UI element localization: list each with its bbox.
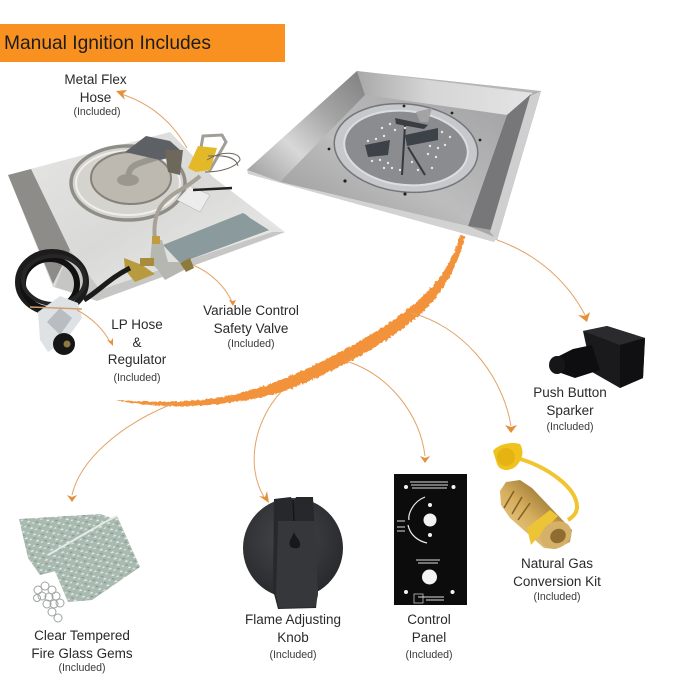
- label: flame adjusting knob: Knob: [277, 630, 309, 645]
- label: push button sparker: Push Button: [533, 385, 607, 400]
- label: safety valve: [203, 303, 299, 350]
- label: control panel: [405, 612, 453, 661]
- label: fire glass gems: Clear Tempered: [34, 628, 130, 643]
- label: control panel: Control: [407, 612, 451, 627]
- label: flame adjusting knob: [245, 612, 341, 661]
- label: metal flex hose: Hose: [80, 90, 111, 105]
- label: flame adjusting knob: (Included): [269, 649, 317, 661]
- label: LP hose and regulator: &: [132, 335, 142, 350]
- label: natural gas conversion kit: [513, 556, 601, 603]
- arrow: to control panel: [346, 361, 430, 463]
- arrow: to flame knob: [254, 392, 281, 503]
- arrow: to fire glass: [67, 404, 172, 502]
- arrow: to push button sparker: [497, 240, 590, 322]
- label: flame adjusting knob: Flame Adjusting: [245, 612, 341, 627]
- label: safety valve: Safety Valve: [214, 321, 288, 336]
- photo: installed square burner pan: [247, 71, 541, 242]
- label: safety valve: Variable Control: [203, 303, 299, 318]
- photo: push button sparker: [549, 326, 645, 388]
- photo: control panel plate: [394, 474, 467, 605]
- photo: fire glass bags: [19, 514, 140, 622]
- photo: flame adjusting knob: [243, 497, 343, 609]
- label: safety valve: (Included): [227, 338, 275, 350]
- label: push button sparker: Sparker: [546, 403, 594, 418]
- label: control panel: Panel: [412, 630, 446, 645]
- arrow: to LP hose: [77, 310, 113, 346]
- label: fire glass gems: [31, 628, 133, 674]
- label: push button sparker: (Included): [546, 421, 594, 433]
- arrow: to safety valve: [193, 265, 236, 306]
- label: LP hose and regulator: Regulator: [108, 352, 167, 367]
- arrow: to conversion kit: [411, 313, 517, 433]
- label: LP hose and regulator: LP Hose: [111, 317, 163, 332]
- label: metal flex hose: [64, 72, 127, 118]
- orange brush stroke connector: [115, 235, 465, 406]
- label: LP hose and regulator: (Included): [113, 372, 161, 384]
- label: natural gas conversion kit: Natural Gas: [521, 556, 593, 571]
- title banner: Manual Ignition Includes: [4, 33, 211, 54]
- label: push button sparker: [533, 385, 607, 433]
- label: natural gas conversion kit: Conversion Kit: [513, 574, 601, 589]
- arrow: to metal flex hose: [116, 90, 187, 148]
- label: control panel: (Included): [405, 649, 453, 661]
- photo: natural gas conversion kit: [493, 443, 577, 554]
- label: metal flex hose: (Included): [73, 106, 121, 118]
- label: LP hose and regulator: [108, 317, 167, 384]
- label: natural gas conversion kit: (Included): [533, 591, 581, 603]
- label: fire glass gems: Fire Glass Gems: [31, 646, 133, 661]
- title banner: [0, 24, 285, 62]
- photo: assembled burner pan with valve and hose: [8, 132, 285, 355]
- label: fire glass gems: (Included): [58, 662, 106, 674]
- label: metal flex hose: Metal Flex: [64, 72, 127, 87]
